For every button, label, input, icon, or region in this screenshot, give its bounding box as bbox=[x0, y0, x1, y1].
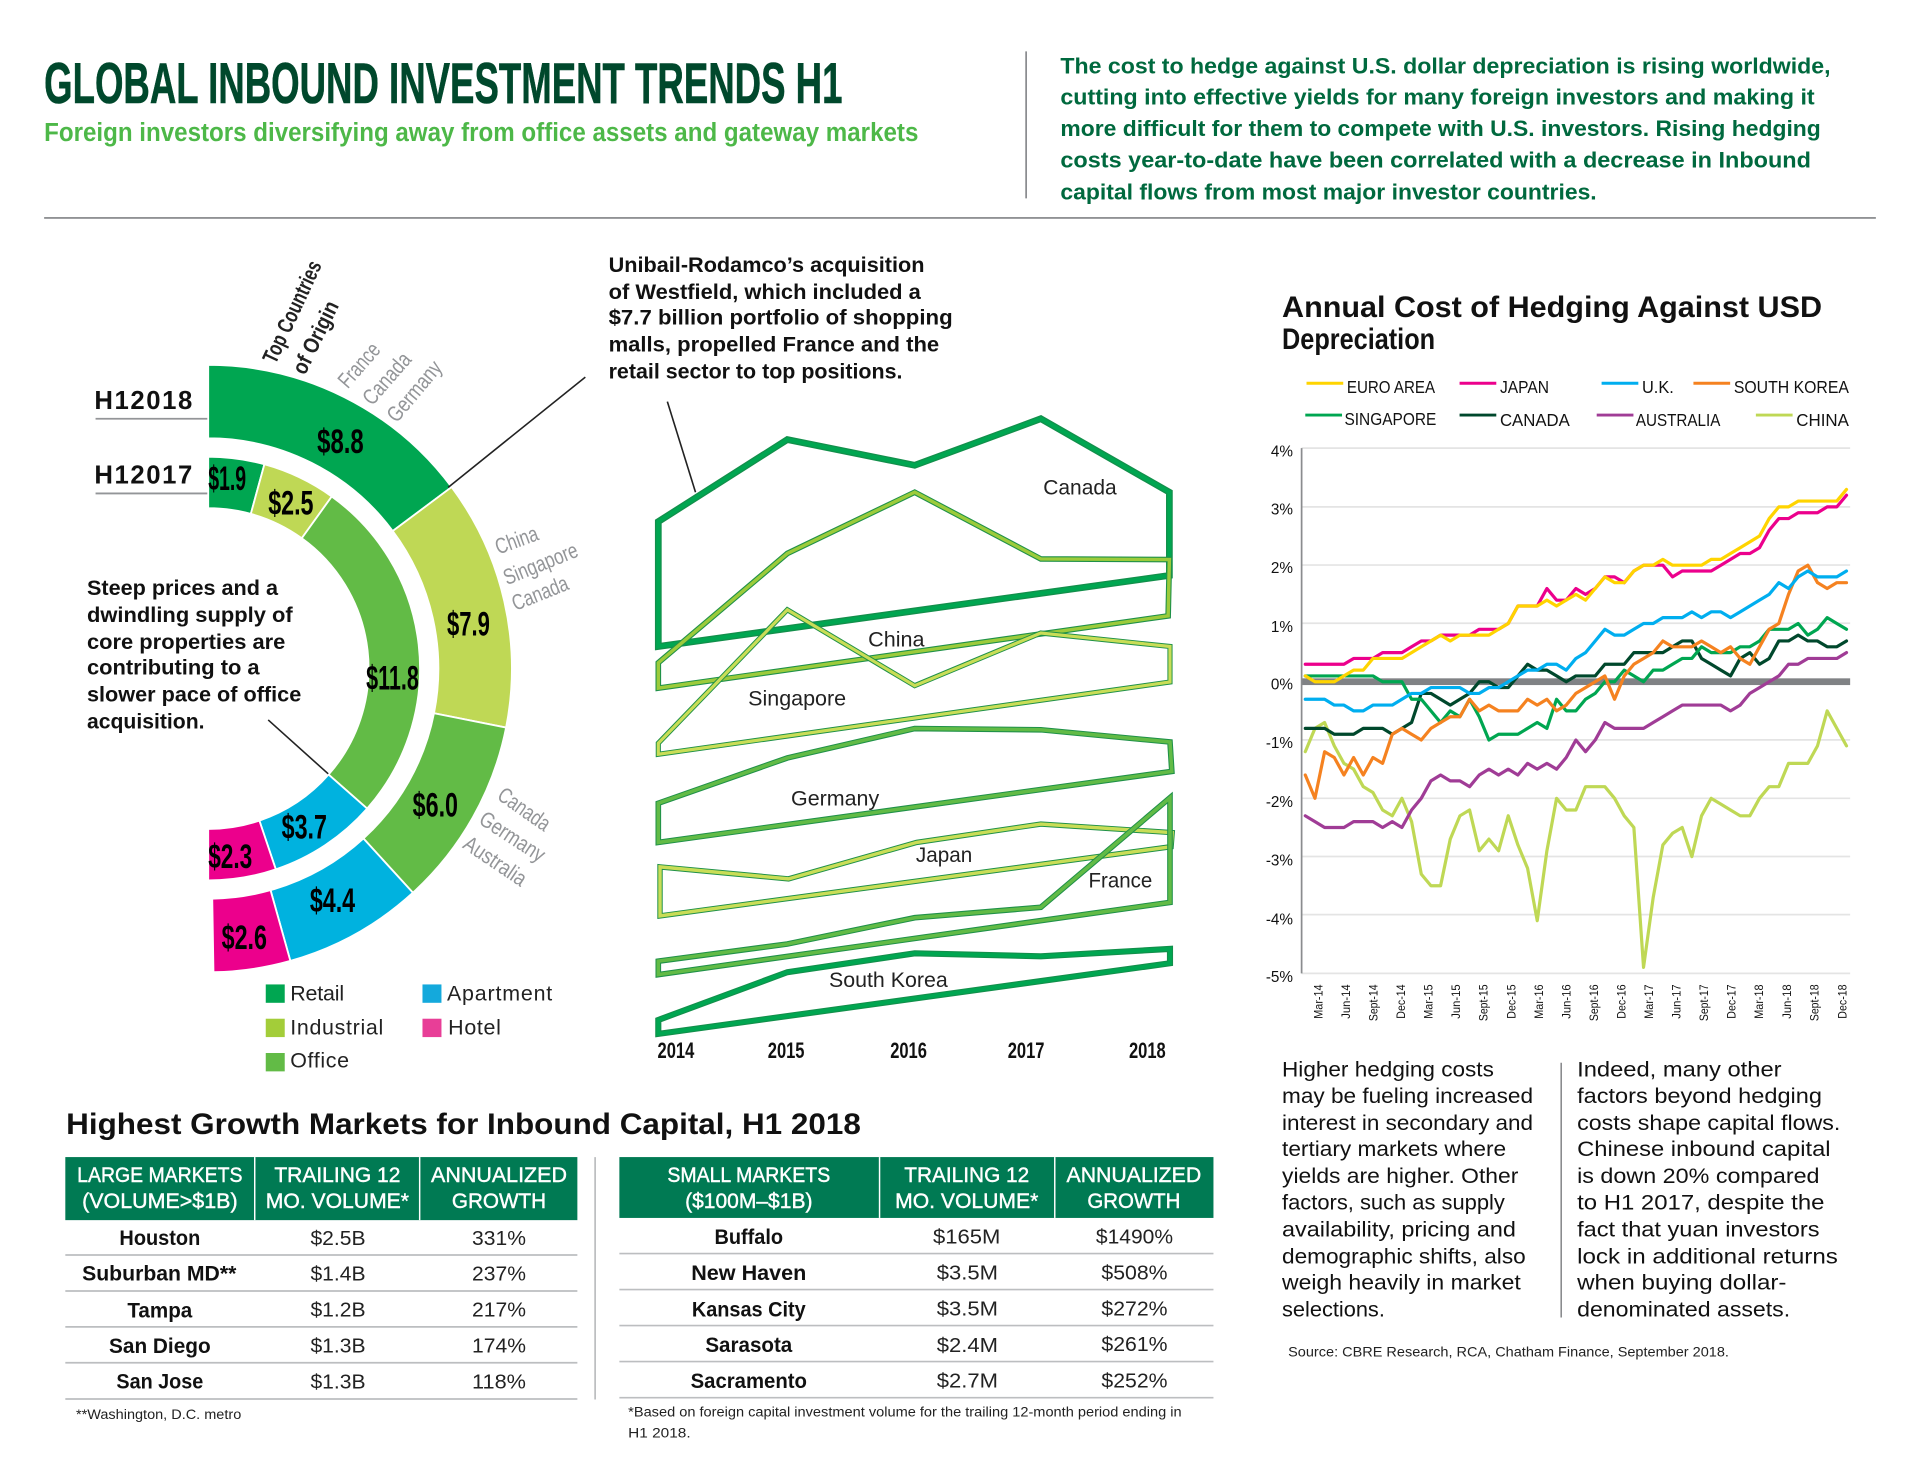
y axis labels: 2% bbox=[1271, 560, 1293, 577]
callout: office acquisition bbox=[87, 576, 328, 774]
office countries bbox=[459, 782, 556, 892]
H12018 label: H12018 bbox=[94, 387, 192, 415]
small markets rows: Sacramento bbox=[691, 1370, 807, 1393]
ribbon: Germany bbox=[658, 729, 1172, 842]
text block: other factors: costs shape capital flows. bbox=[1577, 1111, 1840, 1135]
chart legend: SINGAPORE bbox=[1344, 409, 1436, 429]
segment values: $11.8 bbox=[366, 659, 419, 697]
legend: Hotel bbox=[448, 1016, 501, 1040]
top countries heading: Top Countries bbox=[257, 257, 327, 367]
y axis labels: -2% bbox=[1266, 794, 1293, 811]
inner ring H1 2017 bbox=[208, 457, 420, 880]
small markets rows: $261% bbox=[1101, 1334, 1168, 1356]
y axis labels: -5% bbox=[1266, 969, 1293, 986]
panel: country ribbon chart bbox=[658, 419, 1172, 1063]
text block: higher hedging costs: tertiary markets where bbox=[1282, 1137, 1506, 1161]
large markets header: (VOLUME>$1B) bbox=[82, 1189, 238, 1213]
intro text block: more difficult for them to compete with U.S. investors. Rising hedging bbox=[1060, 116, 1821, 141]
callout: office acquisition: contributing to a bbox=[87, 656, 261, 680]
text block: higher hedging costs bbox=[1281, 1057, 1533, 1321]
intro text block bbox=[1060, 53, 1831, 205]
intro text block: The cost to hedge against U.S. dollar depreciation is rising worldwide, bbox=[1060, 53, 1831, 78]
ribbon: France bbox=[658, 798, 1170, 975]
chart title: Depreciation bbox=[1282, 323, 1435, 356]
series: Canada bbox=[1305, 635, 1846, 734]
office countries: Australia bbox=[459, 831, 532, 892]
series: South Korea bbox=[1305, 565, 1846, 798]
large markets rows: $2.5B bbox=[310, 1228, 366, 1250]
table: large markets bbox=[65, 1157, 577, 1422]
top countries heading: of Origin bbox=[287, 297, 344, 378]
ribbon: Japan bbox=[660, 824, 1172, 916]
subtitle: Foreign investors diversifying away from office assets and gateway markets bbox=[44, 119, 918, 147]
text block: other factors: when buying dollar- bbox=[1576, 1270, 1786, 1294]
y axis labels: 0% bbox=[1271, 676, 1293, 693]
small markets header: ($100M–$1B) bbox=[685, 1189, 812, 1213]
x axis labels: Mar-18 bbox=[1753, 984, 1766, 1019]
small markets header: TRAILING 12 bbox=[904, 1163, 1029, 1187]
large markets rows: $1.2B bbox=[310, 1299, 366, 1321]
large markets rows: $1.4B bbox=[310, 1264, 366, 1286]
x axis labels: Dec-18 bbox=[1836, 984, 1849, 1019]
chart legend: CHINA bbox=[1796, 410, 1849, 430]
series lines bbox=[1305, 489, 1846, 967]
x axis labels: Dec-15 bbox=[1505, 984, 1518, 1019]
x axis labels: Sept-14 bbox=[1368, 984, 1381, 1021]
small markets rows: Buffalo bbox=[715, 1226, 783, 1249]
large markets rows: San Jose bbox=[116, 1370, 203, 1393]
callout: Unibail-Rodamco: of Westfield, which included a bbox=[609, 280, 922, 304]
x axis labels: Sept-18 bbox=[1808, 984, 1821, 1021]
large markets rows: Houston bbox=[119, 1227, 200, 1250]
series: U.K. bbox=[1305, 571, 1846, 711]
segment values: $2.3 bbox=[208, 838, 252, 876]
segment values: $3.7 bbox=[282, 809, 327, 847]
large markets header: MO. VOLUME* bbox=[266, 1189, 409, 1213]
large markets rows: Suburban MD** bbox=[82, 1263, 237, 1286]
x axis labels: Jun-15 bbox=[1450, 984, 1463, 1019]
year axis: 2018 bbox=[1129, 1038, 1166, 1063]
series: Euro area bbox=[1305, 489, 1846, 682]
small markets rows bbox=[691, 1226, 1173, 1393]
large markets rows: San Diego bbox=[109, 1335, 211, 1358]
x axis labels: Sept-17 bbox=[1698, 984, 1711, 1021]
y axis labels: 3% bbox=[1271, 501, 1293, 518]
text block: other factors: to H1 2017, despite the bbox=[1577, 1191, 1824, 1215]
industrial countries: Singapore bbox=[499, 537, 581, 590]
x axis labels: Mar-16 bbox=[1533, 984, 1546, 1019]
y axis labels: -3% bbox=[1266, 853, 1293, 870]
x axis labels: Jun-18 bbox=[1781, 984, 1794, 1019]
text block: other factors: fact that yuan investors bbox=[1577, 1218, 1820, 1242]
segment values: $2.6 bbox=[222, 919, 267, 957]
segment values: $8.8 bbox=[317, 423, 364, 461]
text block: other factors: is down 20% compared bbox=[1577, 1164, 1820, 1188]
text block: higher hedging costs: weigh heavily in market bbox=[1281, 1270, 1521, 1294]
chart title: Annual Cost of Hedging Against USD bbox=[1282, 291, 1822, 324]
x axis labels: Dec-14 bbox=[1395, 984, 1408, 1019]
large markets rows: 174% bbox=[472, 1335, 526, 1357]
large markets header: GROWTH bbox=[452, 1189, 546, 1213]
text block: other factors: Indeed, many other bbox=[1577, 1057, 1782, 1081]
chart legend: U.K. bbox=[1642, 377, 1674, 397]
x axis labels: Sept-15 bbox=[1478, 984, 1491, 1021]
year axis bbox=[658, 1038, 1166, 1063]
segment values: $1.9 bbox=[208, 460, 246, 498]
industrial countries: China bbox=[492, 521, 542, 559]
large markets header: ANNUALIZED bbox=[431, 1163, 567, 1187]
chart legend bbox=[1305, 377, 1849, 430]
segment values: $6.0 bbox=[413, 787, 458, 825]
text block: higher hedging costs: availability, pricing and bbox=[1282, 1218, 1516, 1242]
small markets rows: Kansas City bbox=[692, 1298, 806, 1321]
panel: sector donut chart bbox=[94, 257, 581, 1073]
large markets rows: $1.3B bbox=[310, 1371, 366, 1393]
intro text block: cutting into effective yields for many foreign investors and making it bbox=[1060, 85, 1815, 110]
callout: Unibail-Rodamco: $7.7 billion portfolio of shopping bbox=[609, 305, 953, 329]
large markets header: LARGE MARKETS bbox=[77, 1163, 242, 1187]
small markets rows: Sarasota bbox=[705, 1334, 793, 1357]
office countries: Germany bbox=[475, 806, 550, 867]
industrial countries bbox=[492, 521, 581, 616]
callout: Unibail-Rodamco: retail sector to top positions. bbox=[609, 359, 902, 383]
chart legend: CANADA bbox=[1500, 410, 1570, 430]
series: Singapore bbox=[1305, 618, 1846, 740]
panel: hedging cost chart bbox=[1266, 291, 1850, 1021]
callout: office acquisition: core properties are bbox=[87, 630, 285, 654]
x axis labels: Jun-14 bbox=[1340, 984, 1353, 1019]
x axis labels: Mar-17 bbox=[1643, 984, 1656, 1019]
x axis labels: Dec-17 bbox=[1726, 984, 1739, 1019]
ribbon labels: Singapore bbox=[748, 686, 846, 710]
chart title bbox=[1282, 291, 1822, 356]
x axis labels: Dec-16 bbox=[1615, 984, 1628, 1019]
legend: Office bbox=[290, 1049, 349, 1073]
y axis labels: 4% bbox=[1271, 444, 1293, 461]
x axis labels: Jun-16 bbox=[1560, 984, 1573, 1019]
retail countries: Germany bbox=[381, 355, 447, 427]
ribbon labels: Japan bbox=[916, 843, 972, 867]
source note: Source: CBRE Research, RCA, Chatham Finance, September 2018. bbox=[1288, 1344, 1729, 1360]
small markets header: SMALL MARKETS bbox=[667, 1163, 830, 1187]
callout: office acquisition: dwindling supply of bbox=[87, 603, 294, 627]
text block: higher hedging costs: factors, such as supply bbox=[1282, 1191, 1505, 1215]
office countries: Canada bbox=[493, 782, 556, 836]
text block: other factors: denominated assets. bbox=[1577, 1297, 1790, 1321]
small markets footnote: H1 2018. bbox=[628, 1424, 691, 1440]
legend bbox=[266, 981, 552, 1073]
x axis labels: Sept-16 bbox=[1588, 984, 1601, 1021]
text block: higher hedging costs: Higher hedging costs bbox=[1282, 1057, 1494, 1081]
ribbon labels: France bbox=[1089, 869, 1152, 893]
small markets header: GROWTH bbox=[1087, 1189, 1180, 1213]
small markets header bbox=[667, 1163, 1201, 1213]
small markets header: ANNUALIZED bbox=[1067, 1163, 1201, 1187]
x axis labels: Jun-17 bbox=[1671, 984, 1684, 1019]
chart legend: JAPAN bbox=[1500, 377, 1549, 397]
small markets header: MO. VOLUME* bbox=[895, 1189, 1038, 1213]
large markets footnote: **Washington, D.C. metro bbox=[76, 1406, 241, 1422]
large markets rows: $1.3B bbox=[310, 1335, 366, 1357]
retail countries bbox=[333, 337, 447, 427]
small markets rows: $272% bbox=[1101, 1299, 1168, 1321]
text block: higher hedging costs: may be fueling increased bbox=[1282, 1084, 1533, 1108]
large markets rows: 217% bbox=[472, 1299, 526, 1321]
small markets rows: $3.5M bbox=[937, 1263, 998, 1285]
y axis labels: -4% bbox=[1266, 911, 1293, 928]
large markets header: TRAILING 12 bbox=[274, 1163, 400, 1187]
small markets rows: $3.5M bbox=[937, 1299, 998, 1321]
text block: other factors bbox=[1576, 1057, 1840, 1321]
text block: higher hedging costs: selections. bbox=[1282, 1297, 1385, 1321]
callout: Unibail-Rodamco: malls, propelled France and the bbox=[609, 332, 939, 356]
text block: higher hedging costs: demographic shifts, also bbox=[1282, 1245, 1526, 1269]
year axis: 2017 bbox=[1008, 1038, 1044, 1063]
year axis: 2015 bbox=[768, 1038, 804, 1063]
intro text block: costs year-to-date have been correlated with a decrease in Inbound bbox=[1060, 148, 1811, 173]
chart legend: AUSTRALIA bbox=[1636, 410, 1721, 430]
year axis: 2016 bbox=[890, 1038, 927, 1063]
callout: office acquisition: Steep prices and a bbox=[87, 576, 279, 600]
H12017 label: H12017 bbox=[94, 462, 192, 490]
legend: Industrial bbox=[290, 1016, 383, 1040]
small markets rows: New Haven bbox=[691, 1262, 806, 1285]
segment values: $7.9 bbox=[447, 605, 490, 643]
outer ring H1 2018 bbox=[208, 365, 512, 972]
small markets rows: $1490% bbox=[1096, 1226, 1173, 1248]
industrial countries: Canada bbox=[508, 570, 572, 616]
legend: Apartment bbox=[447, 981, 552, 1005]
callout: Unibail-Rodamco: Unibail-Rodamco’s acquisition bbox=[609, 253, 924, 277]
small markets rows: $2.7M bbox=[937, 1370, 998, 1392]
large markets rows: 331% bbox=[472, 1228, 526, 1250]
ribbon: Canada bbox=[658, 419, 1169, 646]
callout: office acquisition: slower pace of office bbox=[87, 683, 301, 707]
text block: other factors: Chinese inbound capital bbox=[1577, 1137, 1831, 1161]
series: Australia bbox=[1305, 653, 1846, 827]
x axis labels: Mar-14 bbox=[1312, 984, 1325, 1019]
ribbon labels: South Korea bbox=[829, 968, 948, 992]
y axis labels bbox=[1266, 444, 1293, 986]
ribbon labels: China bbox=[868, 627, 925, 651]
ribbon labels: Germany bbox=[791, 787, 879, 811]
small markets footnote: *Based on foreign capital investment volume for the trailing 12-month period ending in bbox=[628, 1404, 1182, 1420]
text block: higher hedging costs: interest in secondary and bbox=[1282, 1111, 1533, 1135]
chart legend: EURO AREA bbox=[1347, 377, 1436, 397]
ribbon: Singapore bbox=[658, 610, 1170, 754]
small markets rows: $508% bbox=[1101, 1263, 1168, 1285]
year axis: 2014 bbox=[658, 1038, 695, 1063]
segment values: $2.5 bbox=[268, 484, 314, 522]
header bbox=[44, 51, 1831, 205]
large markets rows bbox=[82, 1227, 526, 1393]
title: GLOBAL INBOUND INVESTMENT TRENDS H1 bbox=[44, 52, 842, 116]
series: China bbox=[1305, 711, 1846, 967]
y axis labels: -1% bbox=[1266, 735, 1293, 752]
callout: office acquisition: acquisition. bbox=[87, 710, 205, 734]
large markets rows: 237% bbox=[472, 1264, 526, 1286]
table: small markets bbox=[619, 1157, 1213, 1440]
text block: other factors: factors beyond hedging bbox=[1577, 1084, 1822, 1108]
segment values bbox=[208, 423, 490, 957]
chart legend: SOUTH KOREA bbox=[1734, 377, 1849, 397]
callout: Unibail-Rodamco bbox=[448, 253, 953, 492]
small markets rows: $252% bbox=[1101, 1370, 1168, 1392]
x axis labels bbox=[1312, 984, 1849, 1021]
x axis labels: Mar-15 bbox=[1423, 984, 1436, 1019]
text block: higher hedging costs: yields are higher. Other bbox=[1282, 1164, 1518, 1188]
text block: other factors: lock in additional returns bbox=[1577, 1245, 1838, 1269]
legend: Retail bbox=[290, 981, 344, 1005]
heading: highest growth markets: Highest Growth Markets for Inbound Capital, H1 2018 bbox=[66, 1108, 861, 1141]
large markets header bbox=[77, 1163, 567, 1213]
small markets rows: $2.4M bbox=[937, 1335, 998, 1357]
ribbon labels: Canada bbox=[1043, 476, 1117, 500]
series: Japan bbox=[1305, 495, 1846, 664]
large markets rows: Tampa bbox=[127, 1299, 193, 1322]
small markets footnote bbox=[628, 1404, 1182, 1440]
large markets rows: 118% bbox=[472, 1371, 526, 1393]
ribbon labels bbox=[748, 476, 1152, 992]
ribbon: South Korea bbox=[658, 949, 1170, 1034]
intro text block: capital flows from most major investor countries. bbox=[1060, 180, 1597, 205]
small markets rows: $165M bbox=[933, 1226, 1000, 1248]
ribbon: China bbox=[658, 492, 1169, 688]
segment values: $4.4 bbox=[310, 882, 355, 920]
retail countries: France bbox=[333, 337, 385, 393]
retail countries: Canada bbox=[357, 347, 417, 410]
y axis labels: 1% bbox=[1271, 619, 1293, 636]
